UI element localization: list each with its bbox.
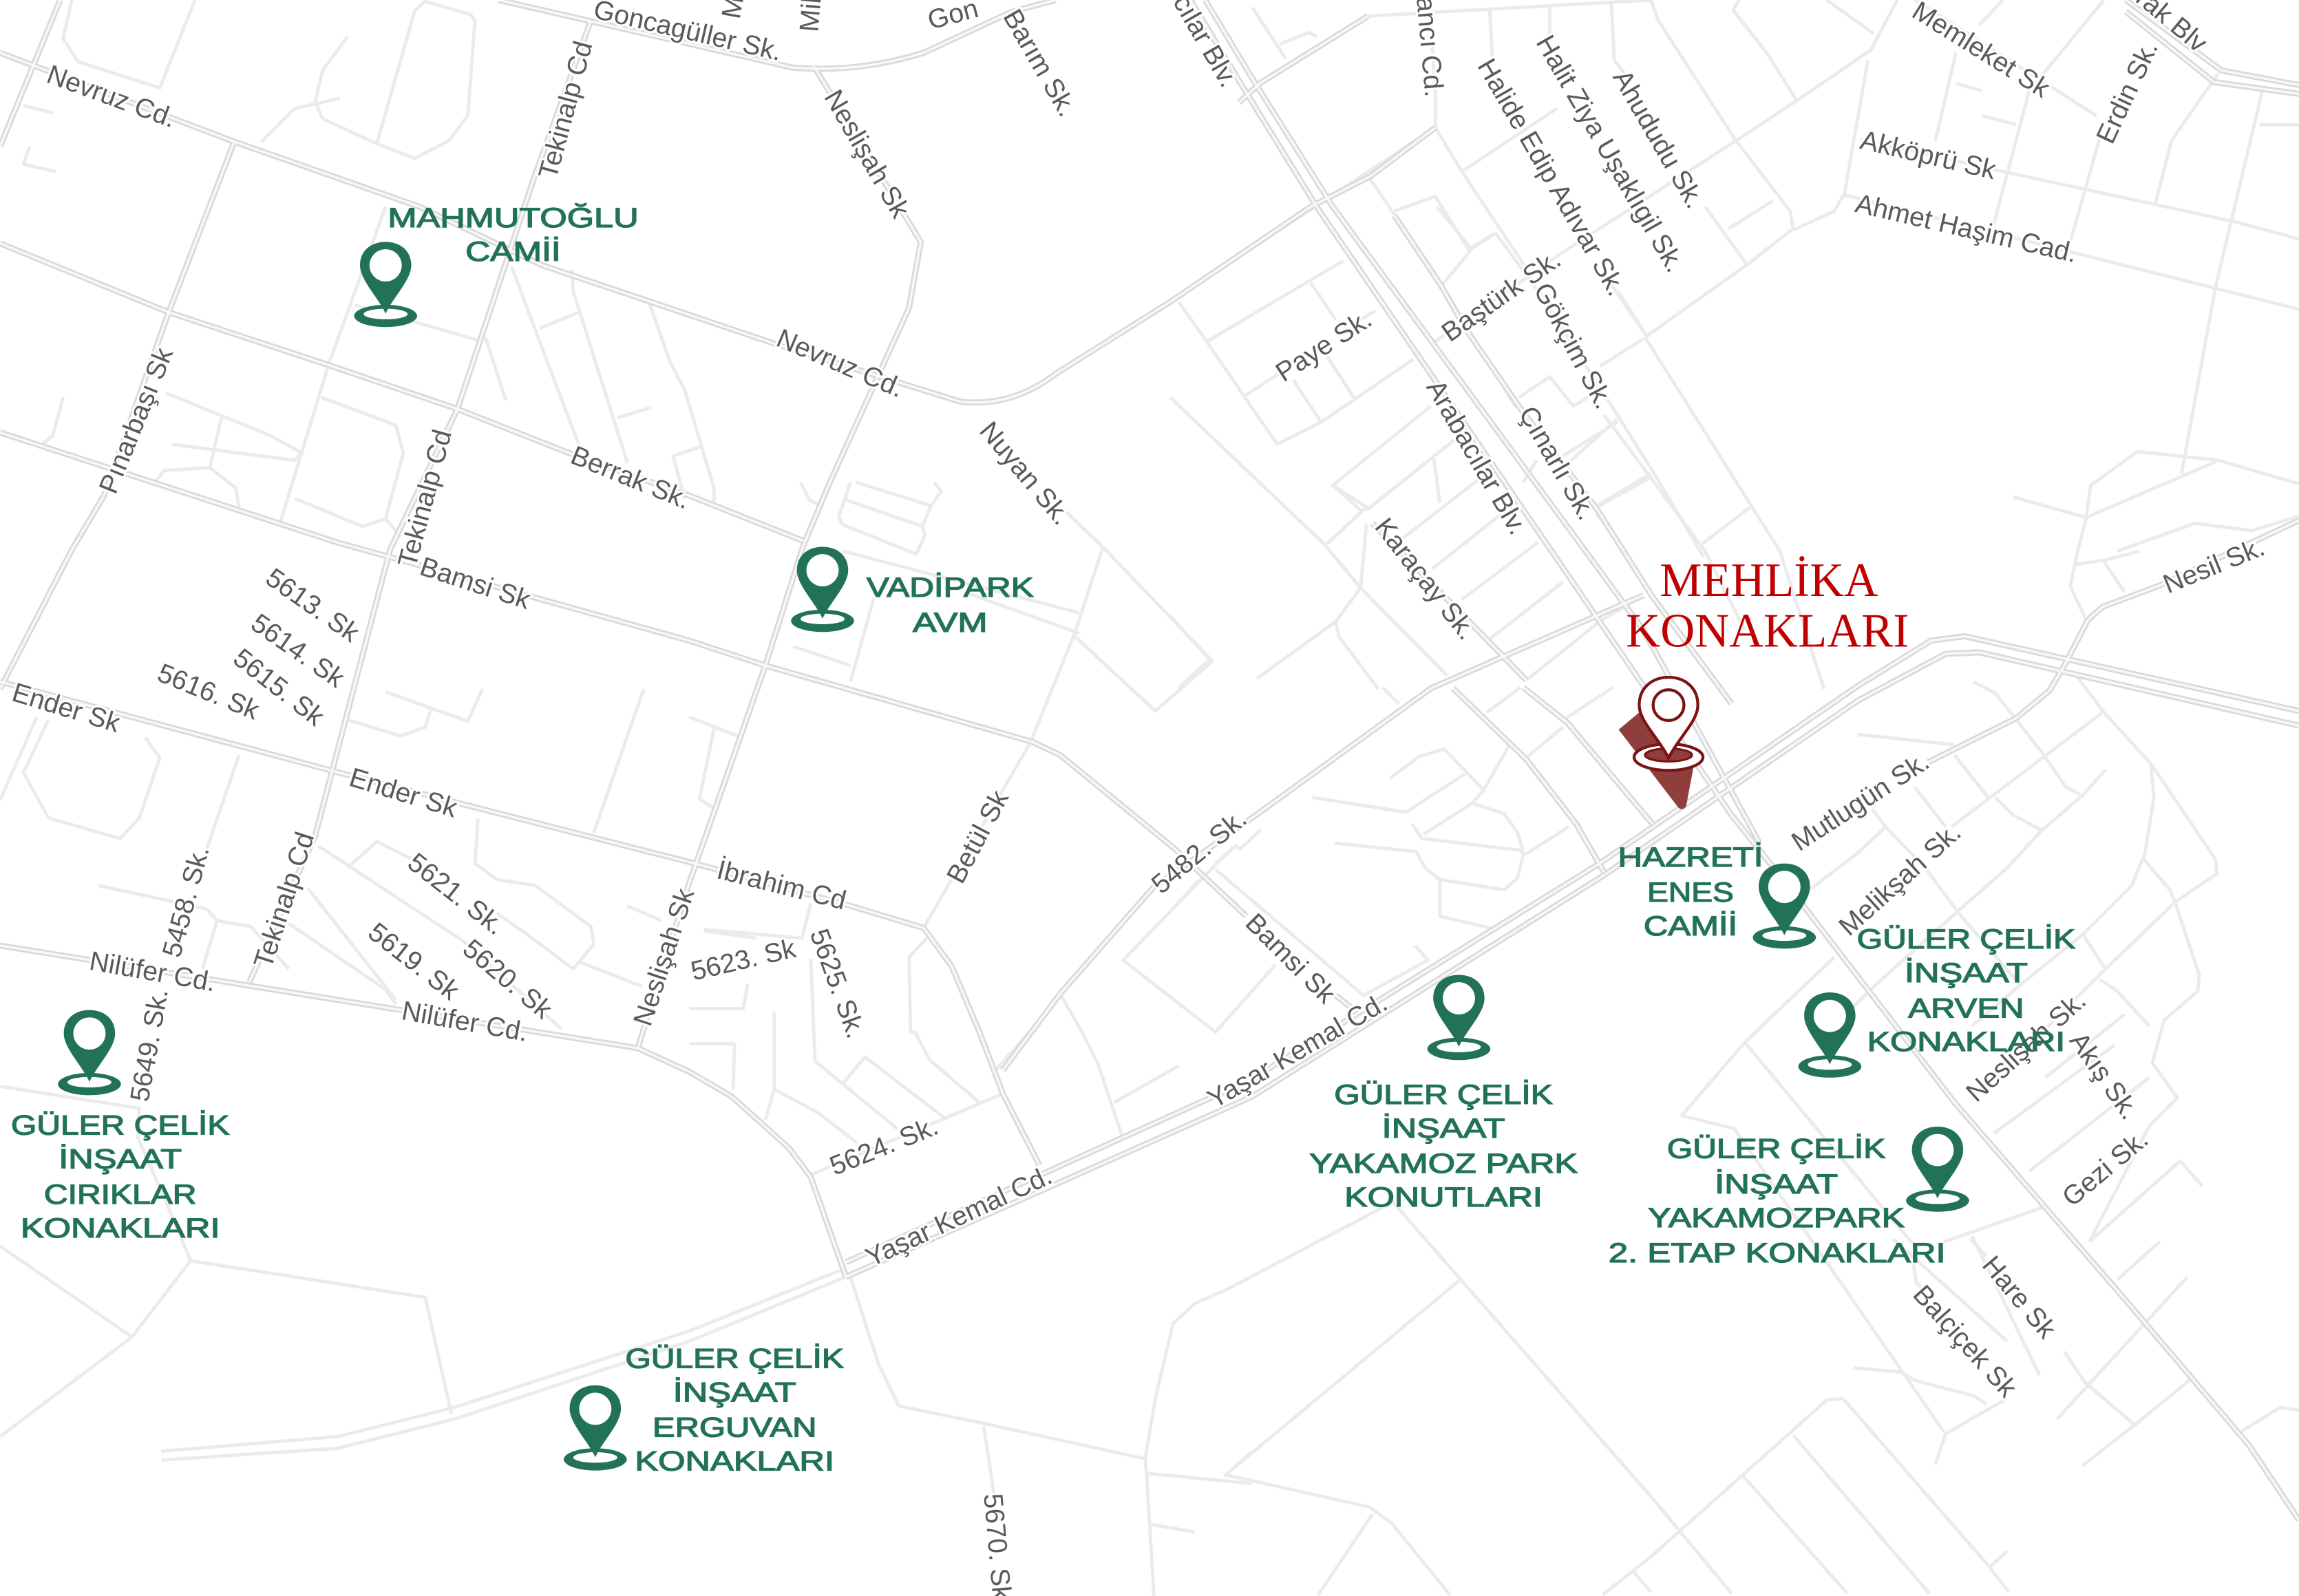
label: Güler Çelik İnşaat Erguvan Konakları: İNŞAAT xyxy=(673,1377,796,1407)
street labels: Baştürk Sk. xyxy=(1437,244,1567,348)
label: Vadipark AVM: AVM xyxy=(913,608,988,638)
street labels: Halit Ziya Uşaklıgil Sk. xyxy=(1530,30,1690,277)
street labels: Çınarlı Sk. xyxy=(1513,401,1602,525)
icon: Mahmutoğlu Camii pin xyxy=(354,242,417,327)
street labels: Hare Sk xyxy=(1976,1251,2062,1344)
street labels: Berrak Sk. xyxy=(566,440,695,515)
street labels: Tekinalp Cd xyxy=(248,829,320,972)
street labels: Halide Edip Adıvar Sk. xyxy=(1472,54,1631,301)
label: Vadipark AVM: VADİPARK xyxy=(867,573,1034,603)
icon: Arven pin xyxy=(1799,992,1861,1078)
street labels: Balçiçek Sk xyxy=(1907,1279,2022,1403)
street labels: Ahududu Sk. xyxy=(1607,65,1710,213)
street labels: Arabacılar Blv. xyxy=(1420,375,1533,540)
label: Güler Çelik İnşaat Arven Konakları xyxy=(1857,924,2075,1057)
icon: Erguvan pin xyxy=(564,1385,627,1471)
street labels: Karaçay Sk. xyxy=(1368,513,1481,646)
label: Mahmutoğlu Camii xyxy=(388,203,639,267)
label: Güler Çelik İnşaat Arven Konakları: KONAKLARI xyxy=(1867,1027,2065,1057)
street labels: 5616. Sk xyxy=(153,658,264,725)
icon: Vadipark AVM pin xyxy=(791,547,854,632)
label: Mahmutoğlu Camii: MAHMUTOĞLU xyxy=(388,203,639,233)
street labels: 5625. Sk. xyxy=(804,925,871,1042)
label: Güler Çelik İnşaat Cırıklar Konakları xyxy=(11,1111,229,1244)
street labels: Yaşar Kemal Cd. xyxy=(1203,988,1392,1114)
street labels: Pınarbaşı Sk xyxy=(94,343,179,498)
street labels: Ender Sk xyxy=(9,678,124,738)
street labels: Paye Sk. xyxy=(1271,304,1377,387)
street labels: 5620. Sk xyxy=(457,934,558,1025)
street labels: Betül Sk xyxy=(942,785,1015,889)
label: Güler Çelik İnşaat Yakamoz Park Konutları: YAKAMOZ PARK xyxy=(1309,1149,1578,1179)
street labels: Nuyan Sk. xyxy=(973,416,1077,531)
label: Güler Çelik İnşaat Yakamoz Park Konutları: KONUTLARI xyxy=(1344,1182,1543,1213)
street labels: Gökçim Sk. xyxy=(1528,278,1619,414)
label: Güler Çelik İnşaat Cırıklar Konakları: KONAKLARI xyxy=(21,1213,220,1244)
label: Güler Çelik İnşaat Erguvan Konakları: ERGUVAN xyxy=(653,1412,816,1443)
parcel: Mehlika site xyxy=(1619,712,1693,809)
icon: Hazreti Enes Camii pin xyxy=(1753,864,1816,948)
street labels: Nevruz Cd. xyxy=(43,60,180,134)
street labels: Neslişah Sk xyxy=(818,85,915,223)
label: Güler Çelik İnşaat Yakamoz Park Konutları: İNŞAAT xyxy=(1382,1114,1505,1144)
street labels: Bamsi Sk xyxy=(416,552,534,615)
label: Mahmutoğlu Camii: CAMİİ xyxy=(465,237,561,267)
street labels: Nilüfer Cd. xyxy=(87,946,218,997)
title: Mehlika Konakları: MEHLİKA xyxy=(1660,553,1878,607)
street labels: Nilüfer Cd. xyxy=(399,996,530,1047)
street labels: Akış Sk. xyxy=(2064,1027,2145,1125)
title: Mehlika Konakları: KONAKLARI xyxy=(1626,604,1909,657)
label: Güler Çelik İnşaat Erguvan Konakları: KONAKLARI xyxy=(635,1446,834,1476)
icon: Cırıklar pin xyxy=(58,1010,121,1095)
label: Güler Çelik İnşaat Cırıklar Konakları: CIRIKLAR xyxy=(44,1180,196,1210)
street labels: Barım Sk. xyxy=(997,4,1082,122)
label: Güler Çelik İnşaat Arven Konakları: GÜLER ÇELİK xyxy=(1857,924,2075,955)
label: Güler Çelik İnşaat Yakamozpark 2. Etap Konakları: YAKAMOZPARK xyxy=(1648,1203,1905,1233)
street labels: Neslişah Sk xyxy=(628,885,700,1030)
street labels: İbrahim Cd xyxy=(714,855,849,916)
street labels: 5613. Sk xyxy=(260,563,365,648)
label: Güler Çelik İnşaat Arven Konakları: İNŞAAT xyxy=(1905,958,2028,988)
street labels: 5624. Sk. xyxy=(826,1111,942,1182)
label: Güler Çelik İnşaat Yakamoz Park Konutları xyxy=(1309,1080,1578,1213)
street labels: Erdin Sk. xyxy=(2091,36,2164,148)
icon: Yakamoz Park pin xyxy=(1428,975,1490,1060)
label: Güler Çelik İnşaat Yakamoz Park Konutları: GÜLER ÇELİK xyxy=(1334,1080,1553,1110)
street labels: Ahmet Haşim Cad. xyxy=(1852,189,2079,268)
label: Hazreti Enes Camii xyxy=(1618,842,1763,941)
street labels: 5458. Sk. xyxy=(157,842,215,961)
label: Hazreti Enes Camii: CAMİİ xyxy=(1644,911,1737,941)
label: Hazreti Enes Camii: HAZRETİ xyxy=(1618,842,1763,873)
label: Güler Çelik İnşaat Yakamozpark 2. Etap Konakları: GÜLER ÇELİK xyxy=(1667,1134,1885,1164)
street labels: 5621. Sk. xyxy=(402,847,510,941)
label: Güler Çelik İnşaat Erguvan Konakları: GÜLER ÇELİK xyxy=(626,1343,844,1374)
street labels: Ender Sk xyxy=(346,763,461,824)
street labels: 5615. Sk xyxy=(228,643,330,732)
title: Mehlika Konakları xyxy=(1626,553,1909,657)
street labels: 5619. Sk xyxy=(363,917,465,1006)
street labels: Bamsi Sk xyxy=(1240,908,1341,1010)
street labels: Yaşar Kemal Cd. xyxy=(861,1160,1057,1273)
street labels: Nesil Sk. xyxy=(2159,532,2269,599)
street labels: 5482. Sk. xyxy=(1146,804,1253,900)
label: Güler Çelik İnşaat Yakamozpark 2. Etap Konakları: 2. ETAP KONAKLARI xyxy=(1609,1238,1946,1268)
label: Güler Çelik İnşaat Arven Konakları: ARVEN xyxy=(1908,993,2024,1023)
street labels: Mutlugün Sk. xyxy=(1786,747,1935,857)
label: Vadipark AVM xyxy=(867,573,1034,638)
label: Güler Çelik İnşaat Yakamozpark 2. Etap Konakları: İNŞAAT xyxy=(1715,1169,1838,1200)
label: Güler Çelik İnşaat Cırıklar Konakları: GÜLER ÇELİK xyxy=(11,1111,229,1141)
icon: Mehlika pin xyxy=(1634,677,1703,770)
street labels: Melikşah Sk. xyxy=(1834,818,1967,941)
street labels: Tekinalp Cd xyxy=(533,38,599,182)
icon: Yakamozpark 2. Etap pin xyxy=(1906,1127,1969,1212)
street labels: Akköprü Sk xyxy=(1858,125,1999,185)
label: Güler Çelik İnşaat Yakamozpark 2. Etap Konakları xyxy=(1609,1134,1946,1268)
label: Güler Çelik İnşaat Cırıklar Konakları: İNŞAAT xyxy=(59,1145,182,1175)
street labels: Tekinalp Cd xyxy=(392,427,458,571)
street labels: Gezi Sk. xyxy=(2057,1125,2154,1213)
street labels: 5614. Sk xyxy=(246,608,350,694)
street labels: 5649. Sk. xyxy=(125,986,174,1104)
label: Güler Çelik İnşaat Erguvan Konakları xyxy=(626,1343,844,1476)
street labels: 5623. Sk xyxy=(688,934,799,987)
street labels: Neslişah Sk. xyxy=(1960,986,2092,1108)
label: Hazreti Enes Camii: ENES xyxy=(1647,877,1734,908)
street labels: Nevruz Cd. xyxy=(772,323,908,403)
